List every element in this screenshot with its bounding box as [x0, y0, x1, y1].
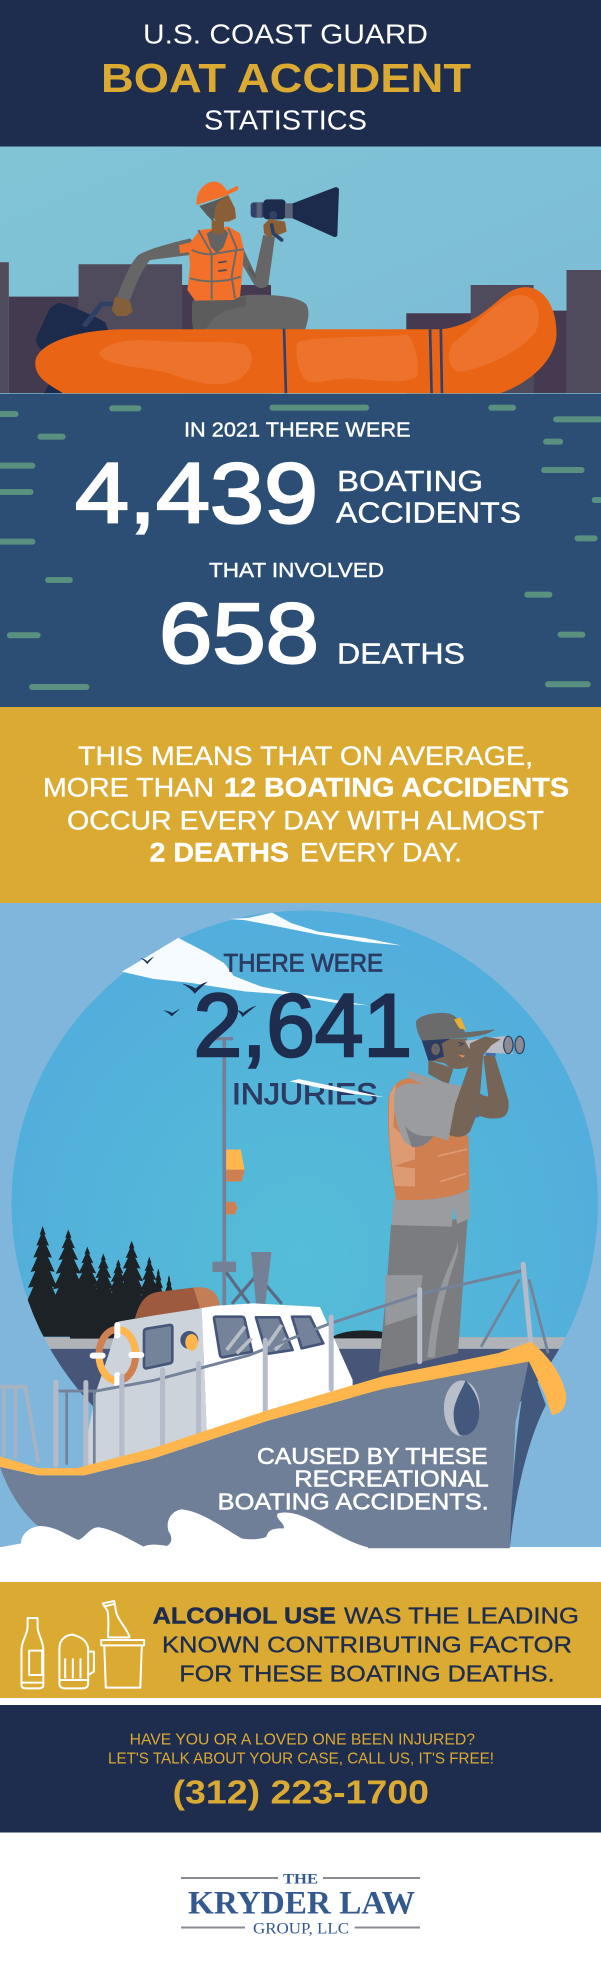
birds: [140, 956, 257, 1017]
callout line 4: EVERY DAY.: [300, 838, 462, 868]
hull emblem: [444, 1381, 480, 1436]
gunwale stripe: [0, 1342, 566, 1475]
label: injuries: INJURIES: [232, 1078, 378, 1111]
number: 658: 658: [159, 586, 319, 682]
title line: Statistics: STATISTICS: [204, 104, 367, 136]
boat hull: [0, 1342, 566, 1548]
logo: The Kryder Law Group, LLC: KRYDER LAW: [188, 1885, 415, 1921]
pine trees: [24, 1226, 177, 1339]
alcohol line 3: FOR THESE BOATING DEATHS.: [179, 1661, 555, 1687]
city skyline silhouette: [0, 262, 601, 393]
panel: accident and death totals: [0, 394, 601, 707]
outboard motor: [36, 303, 113, 393]
white wave foam: [0, 1509, 368, 1553]
crew member with binoculars: [379, 1013, 524, 1372]
number: 4,439: 4,439: [75, 446, 318, 542]
small cloud over text: [289, 1079, 384, 1097]
panel: call to action: [0, 1705, 601, 1832]
text: there were: THERE WERE: [224, 951, 383, 978]
icon: life ring: [93, 1325, 141, 1385]
title line: Boat Accident: BOAT ACCIDENT: [101, 55, 471, 101]
caption: caused by these recreational boating accidents: CAUSED BY THESE: [257, 1443, 488, 1469]
alcohol line 1: [153, 1602, 579, 1628]
callout line 4: 2 DEATHS: [150, 838, 289, 868]
callout line 2: MORE THAN: [43, 773, 214, 803]
number: 2,641: 2,641: [194, 975, 412, 1075]
icons: bottle, beer mug, ice bucket: [21, 1601, 144, 1688]
logo: The Kryder Law Group, LLC: GROUP, LLC: [253, 1920, 349, 1937]
header panel: [0, 0, 601, 146]
orange inflatable raft: [35, 287, 557, 393]
mast with flags: [211, 1037, 282, 1305]
panel: daily average callout: [0, 707, 601, 903]
callout line 1: THIS MEANS THAT ON AVERAGE,: [78, 741, 533, 771]
water dashes: [0, 405, 601, 690]
caption: caused by these recreational boating accidents: RECREATIONAL: [294, 1466, 489, 1492]
rescuer figure: [112, 182, 339, 330]
water: [50, 1348, 560, 1430]
caption: caused by these recreational boating accidents: [218, 1443, 489, 1514]
title line: U.S. Coast Guard: U.S. COAST GUARD: [143, 18, 428, 50]
logo: The Kryder Law Group, LLC: [181, 1871, 420, 1937]
callout line 2: 12 BOATING ACCIDENTS: [224, 773, 569, 803]
label: deaths: DEATHS: [337, 638, 465, 670]
deck railing: [0, 1265, 548, 1465]
cabin: [85, 1287, 353, 1470]
panel: injuries illustration: [0, 900, 601, 1553]
logo: The Kryder Law Group, LLC: THE: [283, 1871, 318, 1887]
alcohol line 1: WAS THE LEADING: [344, 1602, 579, 1628]
far shore: [333, 1330, 383, 1338]
cabin windows: [144, 1317, 323, 1368]
icon: megaphone: [251, 187, 339, 237]
caption: caused by these recreational boating accidents: BOATING ACCIDENTS.: [218, 1488, 489, 1514]
callout line 4: [150, 838, 462, 868]
callout line 3: OCCUR EVERY DAY WITH ALMOST: [67, 805, 544, 835]
panel: alcohol use: [0, 1582, 601, 1698]
alcohol line 1: ALCOHOL USE: [153, 1602, 336, 1628]
cta line 2: LET'S TALK ABOUT YOUR CASE, CALL US, IT'S FREE!: [108, 1750, 494, 1767]
sky disc with shoreline scene: [12, 910, 598, 1430]
label: boating: BOATING: [337, 466, 483, 498]
label: accidents: ACCIDENTS: [336, 497, 521, 529]
callout line 2: [43, 773, 569, 803]
shoreline band: [38, 1337, 601, 1349]
illustration: rescuer on orange raft with megaphone: [0, 146, 601, 394]
text: in 2021 there were: IN 2021 THERE WERE: [184, 419, 410, 442]
text: that involved: THAT INVOLVED: [209, 559, 384, 582]
clouds: [122, 913, 402, 1005]
phone number: (312) 223-1700: [172, 1773, 429, 1810]
cta line 1: HAVE YOU OR A LOVED ONE BEEN INJURED?: [130, 1731, 475, 1748]
alcohol line 2: KNOWN CONTRIBUTING FACTOR: [162, 1632, 572, 1658]
